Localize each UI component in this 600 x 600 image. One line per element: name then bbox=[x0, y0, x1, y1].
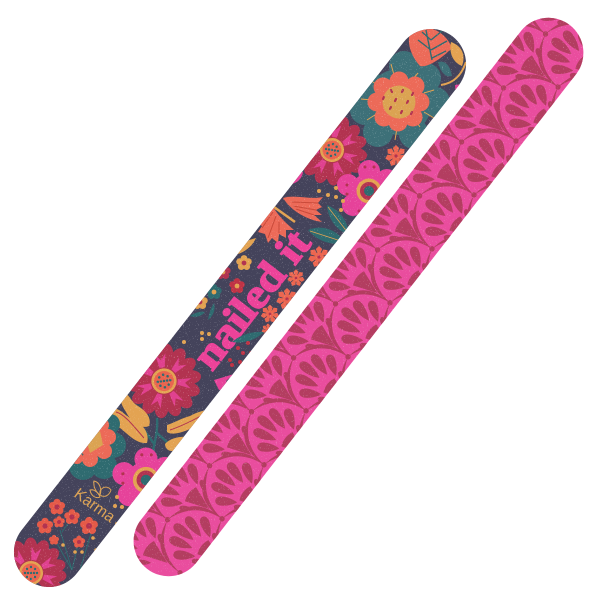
icon: coral bell flowers bbox=[257, 197, 323, 243]
icon: stem with wavy gold leaves bbox=[110, 395, 204, 451]
nail file: pink patterned back bbox=[134, 18, 584, 576]
icon: red daisy, centre bbox=[130, 344, 201, 418]
icon: orange star flower bbox=[385, 145, 405, 166]
icon: slim leaves bbox=[190, 238, 264, 343]
heading: nailed it: nailed it bbox=[183, 220, 320, 378]
icon: small multicolour flowers bbox=[192, 255, 252, 309]
icon: teal leaves bbox=[308, 205, 349, 244]
icon: pink flower, lower bbox=[112, 448, 168, 506]
icon: pink chevron leaf bbox=[214, 374, 234, 390]
icon: gold dots bbox=[317, 186, 345, 212]
icon: coral veined leaf bbox=[409, 28, 452, 66]
icon: gold leaf and stem, top corner bbox=[438, 42, 466, 95]
icon: red blossom sprig bbox=[37, 499, 98, 570]
icon: small orange flowers bbox=[260, 246, 330, 337]
icon: red dot cluster bbox=[228, 341, 253, 367]
icon: Karma logo: Karma bbox=[71, 485, 118, 526]
icon: gold dot cluster bbox=[182, 331, 211, 344]
icon: pink bud bbox=[292, 172, 303, 184]
icon: large teal and coral flower, top bbox=[350, 51, 450, 149]
icon: red daisy, top bbox=[304, 117, 367, 186]
icon: Karma logo bbox=[74, 480, 114, 523]
icon: red daisy, bottom (visible petals only) bbox=[14, 538, 66, 587]
icon: gold leaf, right edge bbox=[300, 274, 322, 296]
nail file: floral navy front bbox=[0, 20, 480, 596]
icon: teal and coral flower, lower left bbox=[69, 414, 126, 480]
icon: pink flower, top bbox=[337, 160, 392, 216]
icon: gold dots, near logo bbox=[113, 495, 124, 526]
speckle bbox=[120, 10, 590, 585]
fan scale pattern bbox=[134, 18, 584, 575]
speckle bbox=[0, 20, 480, 590]
